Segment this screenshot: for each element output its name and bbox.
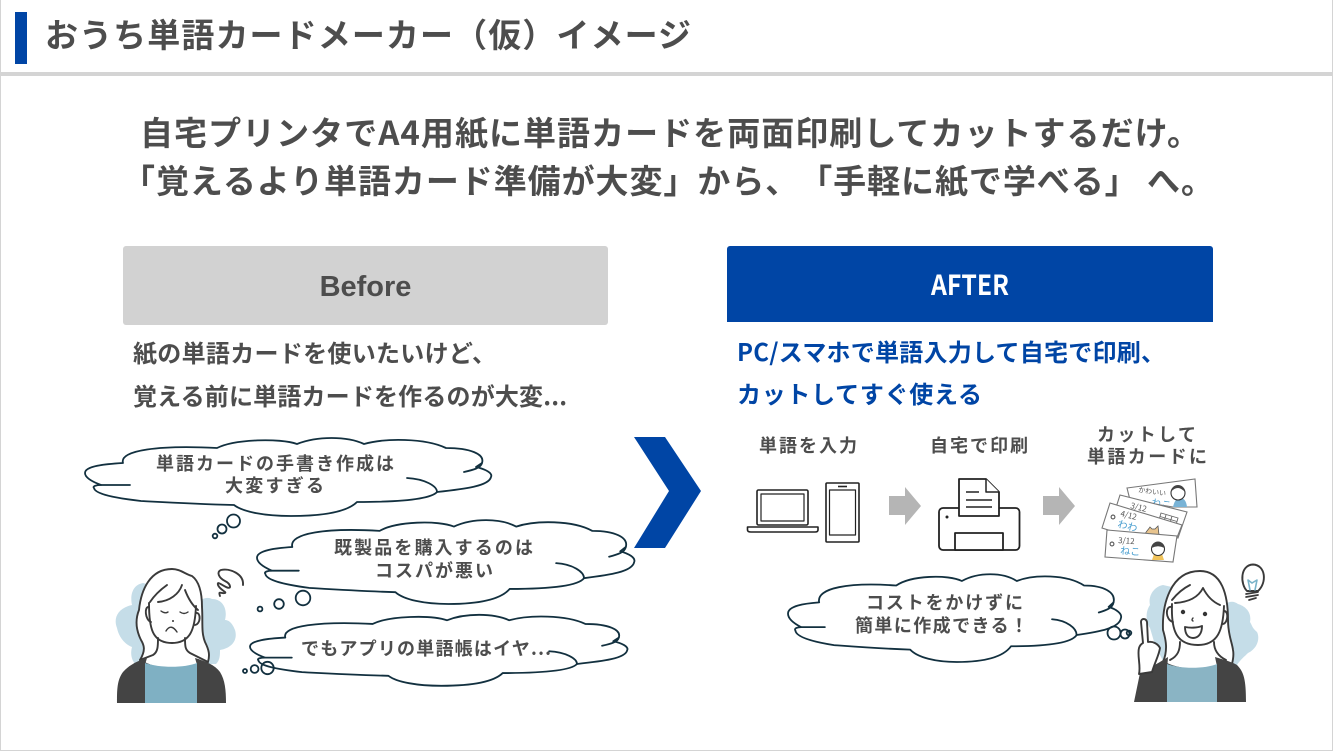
illustration: worried woman xyxy=(116,569,243,703)
panel: after header: AFTER xyxy=(930,264,1009,304)
thought bubble: ready-made cards are costly xyxy=(257,520,634,611)
shirt xyxy=(145,663,197,703)
step label: cut into cards: 単語カードに xyxy=(1087,443,1207,469)
thought bubble: easy without cost: 簡単に作成できる！ xyxy=(855,612,1028,638)
card 3 xyxy=(1102,503,1182,550)
before description: 覚える前に単語カードを作るのが大変... xyxy=(133,377,567,412)
thought bubble: easy without cost xyxy=(788,574,1131,662)
before description: 紙の単語カードを使いたいけど、 xyxy=(133,334,496,369)
card 4: ねこ xyxy=(1120,542,1141,558)
arrow: step 2 to step 3 xyxy=(1043,487,1075,525)
raised hand xyxy=(1138,619,1160,674)
step label: print at home: 自宅で印刷 xyxy=(930,432,1028,458)
headline text: 「覚えるより単語カード準備が大変」から、「手軽に紙で学べる」 へ。 xyxy=(122,155,1214,203)
step label: cut into cards xyxy=(1087,421,1207,469)
thought bubble: no flashcard apps: でもアプリの単語帳はイヤ... xyxy=(301,635,551,661)
hair and face xyxy=(137,569,209,669)
thought bubble: handwriting is hard: 大変すぎる xyxy=(225,472,324,498)
card 1: ねこ xyxy=(1151,494,1172,512)
lightbulb xyxy=(1242,564,1264,600)
jacket xyxy=(1134,657,1246,702)
panel: before header xyxy=(123,246,608,325)
headline text xyxy=(122,107,1214,203)
step label: cut into cards: カットして xyxy=(1097,421,1196,447)
thought bubble: handwriting is hard: 単語カードの手書き作成は xyxy=(156,450,394,476)
icon: flashcards xyxy=(1102,479,1197,562)
before description xyxy=(133,334,567,412)
panel: before header: Before xyxy=(320,271,411,303)
card 3: 4/12 xyxy=(1119,508,1138,523)
after description: カットしてすぐ使える xyxy=(737,375,982,410)
after description xyxy=(737,333,1165,410)
step label: enter words: 単語を入力 xyxy=(759,432,857,458)
icon: printer xyxy=(939,479,1020,550)
after description: PC/スマホで単語入力して自宅で印刷、 xyxy=(737,333,1165,368)
title bar: おうち単語カードメーカー（仮）イメージ xyxy=(45,9,691,57)
background blob xyxy=(1147,585,1258,665)
panel: after header xyxy=(727,246,1213,322)
card 2: 3/12 xyxy=(1129,500,1148,515)
card 1 xyxy=(1127,479,1197,512)
thought bubble: handwriting is hard xyxy=(85,438,491,538)
card 4 xyxy=(1105,530,1177,562)
background blob xyxy=(116,583,236,664)
thought bubble: no flashcard apps xyxy=(243,615,627,686)
hair and face xyxy=(1163,571,1233,670)
arrow: before to after chevron xyxy=(634,437,701,548)
arrow: step 1 to step 2 xyxy=(889,487,921,525)
thought bubble: ready-made cards are costly: コスパが悪い xyxy=(375,557,493,583)
card 1: かわいい xyxy=(1138,485,1167,499)
illustration: happy woman with idea xyxy=(1134,564,1264,702)
dizzy spiral xyxy=(218,570,243,596)
card 3: わわ xyxy=(1116,515,1139,535)
thought bubble: easy without cost: コストをかけずに xyxy=(866,589,1023,615)
thought bubble: ready-made cards are costly: 既製品を購入するのは xyxy=(334,534,533,560)
shirt xyxy=(1167,664,1217,702)
icon: laptop and smartphone xyxy=(748,483,859,542)
headline text: 自宅プリンタでA4用紙に単語カードを両面印刷してカットするだけ。 xyxy=(140,107,1200,155)
jacket xyxy=(117,658,226,703)
card 4: 3/12 xyxy=(1118,535,1136,547)
